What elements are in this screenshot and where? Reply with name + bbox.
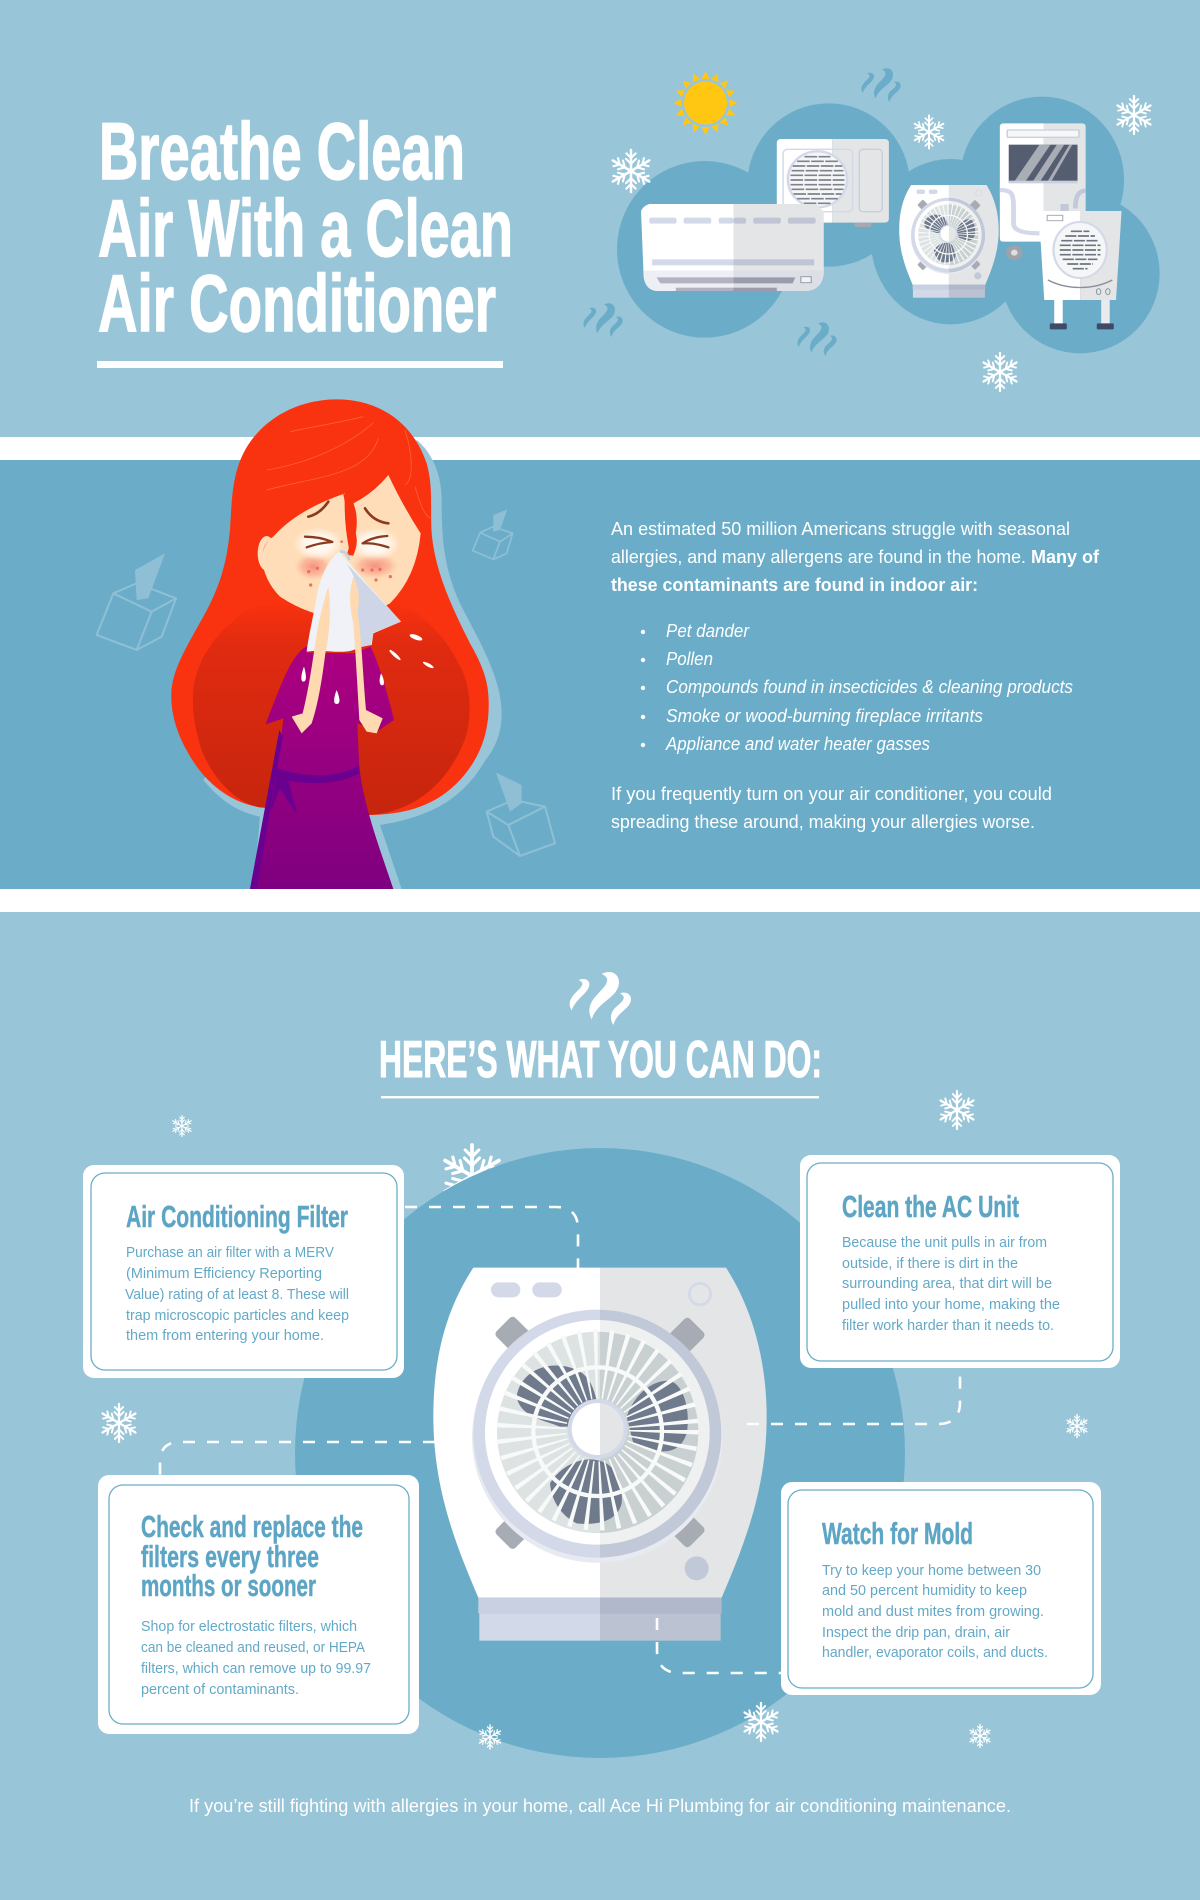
icon: snowflake bottom (981, 353, 1019, 391)
icon: snowflake centre (913, 116, 945, 148)
card: Clean the AC Unit: Clean the AC Unit (842, 1189, 1019, 1224)
intro paragraph: An estimated 50 million Americans struggle with seasonal (611, 519, 1070, 539)
card: Clean the AC Unit (800, 1155, 1120, 1368)
icon: snowflake lower middle right (742, 1703, 780, 1741)
card: Watch for Mold: Inspect the drip pan, drain, air (822, 1625, 1010, 1641)
icon: steam bottom (797, 322, 837, 356)
intro paragraph (611, 519, 1100, 595)
card: Watch for Mold: Try to keep your home between 30 (822, 1563, 1041, 1579)
card: Air Conditioning Filter (83, 1165, 404, 1378)
card: Air Conditioning Filter: Air Conditioning Filter (126, 1199, 348, 1234)
heading underline (381, 1096, 819, 1098)
tissue (307, 552, 401, 652)
allergen list (641, 621, 1073, 754)
icon: snowflake partly hidden (441, 1145, 503, 1207)
icon: steam above heading (570, 972, 631, 1025)
sneeze droplets (301, 633, 434, 704)
illustration: air conditioners group (617, 97, 1160, 353)
icon: tissue box bottom right (487, 773, 555, 856)
card: Watch for Mold: and 50 percent humidity to keep (822, 1583, 1027, 1599)
card: Air Conditioning Filter: them from entering your home. (126, 1328, 324, 1344)
illustration: sneezing girl and tissue boxes (97, 399, 555, 889)
closing paragraph: If you frequently turn on your air conditioner, you could (611, 784, 1052, 804)
card: Air Conditioning Filter: trap microscopic particles and keep (126, 1308, 349, 1324)
large circle backdrop (295, 1148, 905, 1758)
intro paragraph: these contaminants are found in indoor air: (611, 575, 978, 595)
hair (171, 399, 489, 815)
closing paragraph (611, 784, 1052, 832)
card: Check and replace the filters (98, 1475, 419, 1734)
blue cloud backdrop (617, 97, 1160, 353)
card: Watch for Mold: mold and dust mites from growing. (822, 1604, 1044, 1620)
card: Check and replace the filters: Shop for electrostatic filters, which (141, 1619, 357, 1635)
title: Breathe Clean (99, 107, 465, 197)
background: white band (0, 437, 1200, 460)
card: Air Conditioning Filter: Value) rating of at least 8. These will (125, 1287, 349, 1303)
card: Check and replace the filters: filters, which can remove up to 99.97 (141, 1661, 371, 1677)
front air cooler (1039, 211, 1122, 329)
arms and hands (292, 577, 383, 733)
title: Air Conditioner (98, 259, 496, 349)
indoor split AC unit (641, 204, 824, 291)
icon: snowflake left (610, 150, 652, 192)
floor fan small (899, 185, 999, 298)
card: Check and replace the filters: percent of contaminants. (141, 1682, 299, 1698)
card: Check and replace the filters: filters every three (141, 1539, 319, 1574)
icon: sun (674, 71, 738, 135)
card: Watch for Mold: handler, evaporator coils, and ducts. (822, 1645, 1048, 1661)
card: Clean the AC Unit: Because the unit pulls in air from (842, 1235, 1047, 1251)
card: Check and replace the filters: Check and replace the (141, 1509, 363, 1544)
background: middle section (0, 460, 1200, 889)
background: bottom section (0, 912, 1200, 1900)
allergen list: Pollen (666, 649, 713, 669)
allergen list: Compounds found in insecticides & cleaning products (666, 677, 1073, 697)
connector lines (160, 1207, 960, 1673)
allergen list: Appliance and water heater gasses (665, 734, 930, 754)
closing paragraph: spreading these around, making your allergies worse. (611, 812, 1035, 832)
title underline (97, 361, 503, 368)
card: Clean the AC Unit: filter work harder than it needs to. (842, 1318, 1054, 1334)
outdoor AC unit (777, 139, 889, 227)
allergen list: Pet dander (666, 621, 750, 641)
icon: steam left (583, 303, 623, 337)
tall air cooler (1000, 123, 1086, 260)
card: Clean the AC Unit: outside, if there is dirt in the (842, 1256, 1018, 1272)
main floor fan illustration (433, 1268, 767, 1641)
face (258, 475, 421, 618)
background: top section (0, 0, 1200, 437)
card: Air Conditioning Filter: Purchase an air filter with a MERV (126, 1245, 334, 1261)
intro paragraph: allergies, and many allergens are found in the home. (611, 547, 1026, 567)
dress (250, 646, 394, 889)
card: Clean the AC Unit: pulled into your home, making the (842, 1297, 1060, 1313)
icon: snowflake upper right (938, 1091, 976, 1129)
intro paragraph: Many of (1031, 547, 1100, 567)
icon: snowflake lower middle left (478, 1725, 502, 1749)
girl shadow (203, 440, 502, 889)
card: Clean the AC Unit: surrounding area, that dirt will be (842, 1276, 1052, 1292)
section heading: HERE’S WHAT YOU CAN DO: (379, 1031, 822, 1089)
footer call to action: If you’re still fighting with allergies in your home, call Ace Hi Plumbing for air conditioning maintenance. (189, 1796, 1011, 1816)
icon: tissue box left (97, 553, 176, 650)
icon: snowflake upper left (172, 1116, 192, 1136)
icon: snowflake lower right (969, 1724, 991, 1748)
card: Watch for Mold (781, 1482, 1101, 1695)
icon: snowflake right (1066, 1414, 1088, 1438)
allergen list: Smoke or wood-burning fireplace irritants (666, 706, 983, 726)
title: Air With a Clean (98, 184, 513, 274)
icon: snowflake left (100, 1404, 138, 1442)
icon: snowflake right (1115, 96, 1153, 134)
background: white band lower (0, 889, 1200, 912)
card: Check and replace the filters: can be cleaned and reused, or HEPA (141, 1640, 365, 1656)
icon: tissue box top right (473, 509, 513, 559)
card: Watch for Mold: Watch for Mold (822, 1516, 973, 1551)
title (98, 107, 513, 349)
icon: steam top (861, 68, 901, 102)
card: Air Conditioning Filter: (Minimum Efficiency Reporting (126, 1266, 322, 1282)
card: Check and replace the filters: months or sooner (141, 1568, 316, 1603)
